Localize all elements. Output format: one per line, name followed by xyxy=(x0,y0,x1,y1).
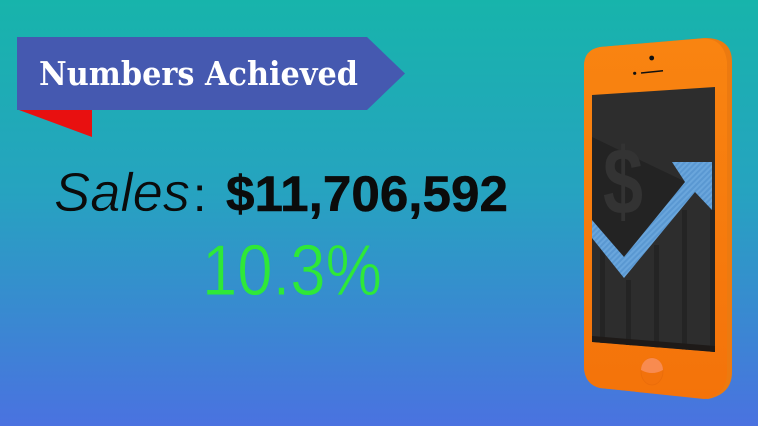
arrow shadow xyxy=(592,137,686,256)
screen chart xyxy=(592,129,715,352)
screen bottom shadow xyxy=(592,336,715,352)
phone side edge xyxy=(584,38,732,399)
sales amount: $11,706,592 xyxy=(226,166,508,222)
camera xyxy=(649,56,654,60)
trend arrow xyxy=(592,162,712,278)
button highlight xyxy=(641,358,663,373)
home button xyxy=(641,358,663,385)
sales colon: : xyxy=(193,169,206,222)
heading: Numbers Achieved xyxy=(39,54,358,93)
banner xyxy=(17,37,405,137)
phone xyxy=(584,38,732,399)
speaker xyxy=(641,71,663,73)
percentage: 10.3% xyxy=(202,231,382,311)
banner ribbon fold xyxy=(19,110,92,137)
chart bars xyxy=(600,210,715,352)
sales figure: Sales xyxy=(54,161,190,223)
sensor dot xyxy=(633,72,636,75)
screen xyxy=(592,87,715,352)
button ring xyxy=(641,358,663,385)
dollar icon: $ xyxy=(603,129,643,235)
phone body xyxy=(584,38,727,399)
banner arrow xyxy=(17,37,405,110)
